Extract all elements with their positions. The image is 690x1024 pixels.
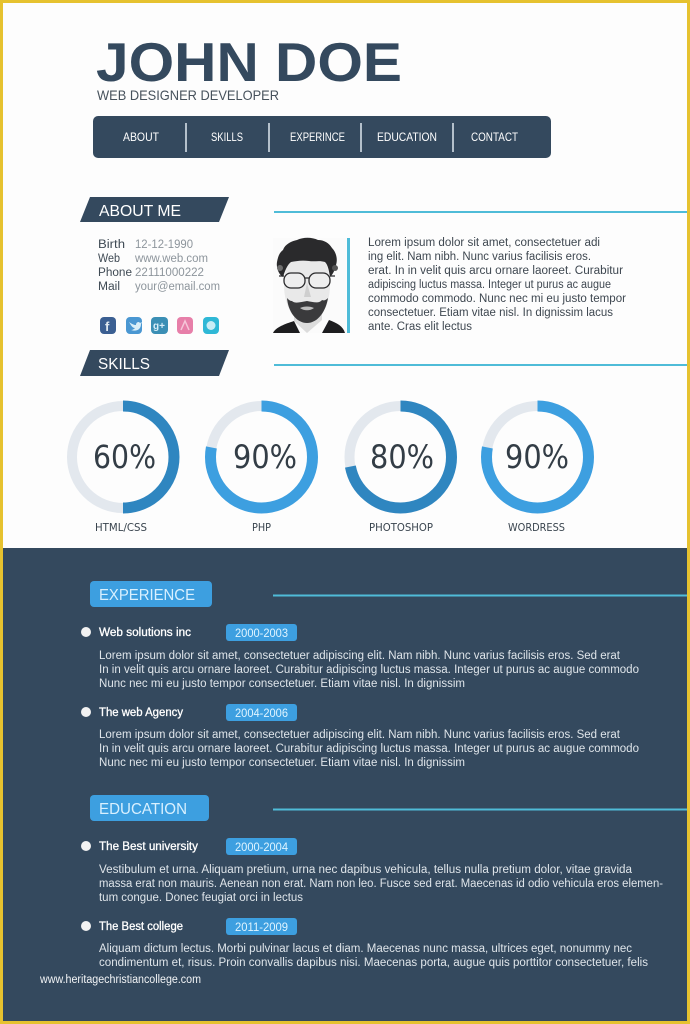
navigation bar: SKILLS bbox=[211, 132, 243, 144]
heading: skills: SKILLS bbox=[98, 356, 150, 373]
education entry 1: tum congue. Donec feugiat orci in lectus bbox=[99, 892, 303, 904]
contact details: www.web.com bbox=[134, 253, 208, 265]
skill ring: Photoshop 80%: 80% bbox=[370, 438, 434, 476]
experience entry 1: Nunc nec mi eu justo tempor consectetuer. Etiam vitae nisl. In dignissim bbox=[99, 678, 465, 690]
experience entry 2: In in velit quis arcu ornare laoreet. Curabitur adipiscing luctus massa. Integer ut purus ac augue commodo bbox=[99, 743, 639, 755]
experience entry 1 bbox=[81, 624, 639, 690]
education entry 1 bbox=[81, 838, 663, 904]
education entry 1: 2000-2004 bbox=[235, 842, 289, 854]
navigation bar: EDUCATION bbox=[377, 132, 437, 144]
education entry 2: condimentum et, risus. Proin convallis dapibus nisi. Maecenas porta, augue quis porttitor consectetuer, felis bbox=[99, 957, 648, 969]
education entry 1: The Best university bbox=[99, 841, 198, 853]
title: JOHN DOE bbox=[96, 31, 402, 93]
about text: adipiscing luctus massa. Integer ut purus ac augue bbox=[368, 279, 611, 291]
skill ring: HTML/CSS 60%: HTML/CSS bbox=[95, 522, 147, 534]
education entry 2: The Best college bbox=[99, 921, 183, 933]
experience entry 2: Lorem ipsum dolor sit amet, consectetuer adipiscing elit. Nam nibh. Nunc varius facilisis eros. Sed erat bbox=[99, 729, 621, 741]
education entry 2 bbox=[81, 918, 648, 969]
heading: experience bbox=[90, 581, 212, 607]
education entry 2: Aliquam dictum lectus. Morbi pulvinar lacus et diam. Maecenas nunc massa, ultrices eget, nonummy nec bbox=[99, 943, 632, 955]
about text: ing elit. Nam nibh. Nunc varius facilisis eros. bbox=[368, 251, 591, 263]
skill ring: PHP 90%: 90% bbox=[233, 438, 297, 476]
watermark: www.heritagechristiancollege.com bbox=[39, 974, 201, 986]
skill ring: PHP 90%: PHP bbox=[252, 522, 271, 534]
experience entry 1: Lorem ipsum dolor sit amet, consectetuer adipiscing elit. Nam nibh. Nunc varius facilisis eros. Sed erat bbox=[99, 650, 621, 662]
contact details: Mail bbox=[98, 281, 120, 293]
navigation bar: EXPERINCE bbox=[290, 132, 345, 144]
skill ring: HTML/CSS 60%: 60% bbox=[93, 438, 156, 476]
contact details: Phone bbox=[98, 267, 132, 279]
contact details bbox=[98, 239, 220, 293]
heading: about me bbox=[80, 197, 229, 222]
education entry 1: Vestibulum et urna. Aliquam pretium, urna nec dapibus vehicula, tellus nulla pretium dolor, vitae gravida bbox=[99, 864, 633, 876]
heading: education bbox=[90, 795, 209, 821]
experience entry 2 bbox=[81, 704, 639, 769]
skill ring: Wordress 90% bbox=[486, 406, 588, 534]
education entry 2: 2011-2009 bbox=[235, 922, 288, 934]
skill ring: PHP 90% bbox=[210, 406, 312, 534]
navigation bar bbox=[93, 116, 551, 158]
heading: skills bbox=[80, 350, 229, 376]
experience entry 2: Nunc nec mi eu justo tempor consectetuer. Etiam vitae nisl. In dignissim bbox=[99, 757, 465, 769]
skill ring: Wordress 90%: 90% bbox=[505, 438, 569, 476]
social icons bbox=[100, 317, 219, 334]
education entry 1: massa erat non mauris. Aenean non erat. Nam non leo. Fusce sed erat. Maecenas id odio vehicula eros elemen- bbox=[99, 878, 663, 890]
contact details: 22111000222 bbox=[135, 267, 204, 279]
contact details: 12-12-1990 bbox=[135, 239, 193, 251]
experience entry 2: The web Agency bbox=[99, 707, 183, 719]
social icons: f bbox=[105, 319, 110, 334]
heading: education: EDUCATION bbox=[99, 801, 187, 818]
subtitle: WEB DESIGNER DEVELOPER bbox=[97, 87, 279, 103]
experience entry 1: Web solutions inc bbox=[99, 627, 191, 639]
about text: ante. Cras elit lectus bbox=[368, 321, 472, 333]
experience entry 1: In in velit quis arcu ornare laoreet. Curabitur adipiscing luctus massa. Integer ut purus ac augue commodo bbox=[99, 664, 639, 676]
portrait photo bbox=[273, 238, 346, 333]
skill ring: Photoshop 80%: PHOTOSHOP bbox=[369, 522, 433, 534]
experience entry 2: 2004-2006 bbox=[235, 708, 288, 720]
about text: commodo commodo. Nunc nec mi eu justo tempor bbox=[368, 293, 626, 305]
navigation bar: ABOUT bbox=[123, 132, 159, 144]
skill ring: Photoshop 80% bbox=[350, 406, 452, 534]
contact details: Web bbox=[98, 253, 120, 265]
contact details: Birth bbox=[98, 239, 125, 251]
skill ring: Wordress 90%: WORDRESS bbox=[508, 522, 565, 534]
skill ring: HTML/CSS 60% bbox=[72, 406, 174, 534]
navigation bar: CONTACT bbox=[471, 132, 518, 144]
heading: about me: ABOUT ME bbox=[99, 203, 181, 220]
social icons: g+ bbox=[153, 321, 165, 332]
about text: Lorem ipsum dolor sit amet, consectetuer adi bbox=[368, 237, 600, 249]
contact details: your@email.com bbox=[135, 281, 220, 293]
about text: consectetuer. Etiam vitae nisl. In dignissim lacus bbox=[368, 307, 613, 319]
about text: erat. In in velit quis arcu ornare laoreet. Curabitur bbox=[368, 265, 623, 277]
about text bbox=[368, 237, 626, 333]
heading: experience: EXPERIENCE bbox=[99, 587, 195, 604]
experience entry 1: 2000-2003 bbox=[235, 628, 288, 640]
